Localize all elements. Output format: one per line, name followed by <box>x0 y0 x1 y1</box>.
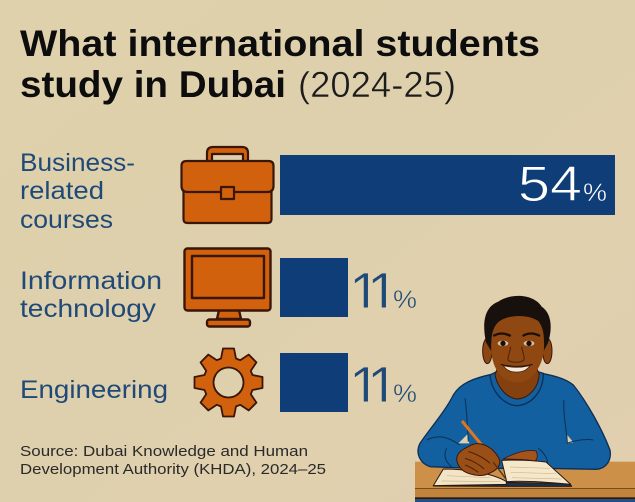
bar: business 54%: % <box>583 179 607 207</box>
label: engineering: Engineering <box>20 376 168 404</box>
bar: engineering 11%: 11 <box>349 355 399 419</box>
nose and mouth <box>501 347 533 372</box>
label: information technology <box>20 267 162 323</box>
open notebook <box>433 460 572 486</box>
bar: engineering 11% <box>280 353 416 412</box>
title: study in Dubai <box>20 64 286 105</box>
icon: briefcase <box>182 147 274 223</box>
bar: information technology 11% <box>280 258 416 317</box>
bar: business 54%: 54 <box>518 156 582 212</box>
source note: Source: Dubai Knowledge and Human <box>20 443 308 460</box>
title <box>20 23 540 105</box>
bar: information technology 11%: 11 <box>349 261 399 325</box>
title: What international students <box>20 23 540 64</box>
left hand <box>503 451 537 461</box>
hand <box>457 444 500 475</box>
page lines <box>442 467 562 482</box>
pencil tip <box>493 462 506 479</box>
icon: gear <box>194 348 262 416</box>
source note <box>20 443 326 478</box>
sweater <box>418 373 610 469</box>
ears <box>483 338 552 364</box>
neck and collar <box>490 360 543 406</box>
gaps under arms <box>458 434 573 443</box>
bar: engineering 11%: % <box>393 380 417 408</box>
bar: business 54% <box>280 155 615 215</box>
illustration: student writing at desk <box>415 296 635 502</box>
finger lines <box>465 452 490 472</box>
face <box>491 316 544 382</box>
title: (2024-25) <box>298 64 456 105</box>
label: business-related courses <box>20 149 135 234</box>
hair <box>484 296 551 352</box>
sweater folds <box>427 398 593 467</box>
label: business-related courses: Business- <box>20 149 135 177</box>
eyes and brows <box>493 333 540 346</box>
label: business-related courses: related <box>20 177 104 205</box>
bar: information technology 11%: % <box>393 286 417 314</box>
desk <box>415 462 635 502</box>
label: information technology: Information <box>20 267 162 295</box>
label: information technology: technology <box>20 295 157 323</box>
source note: Development Authority (KHDA), 2024–25 <box>20 461 326 478</box>
label: business-related courses: courses <box>20 206 113 234</box>
pencil <box>462 421 482 445</box>
icon: monitor <box>184 248 270 326</box>
